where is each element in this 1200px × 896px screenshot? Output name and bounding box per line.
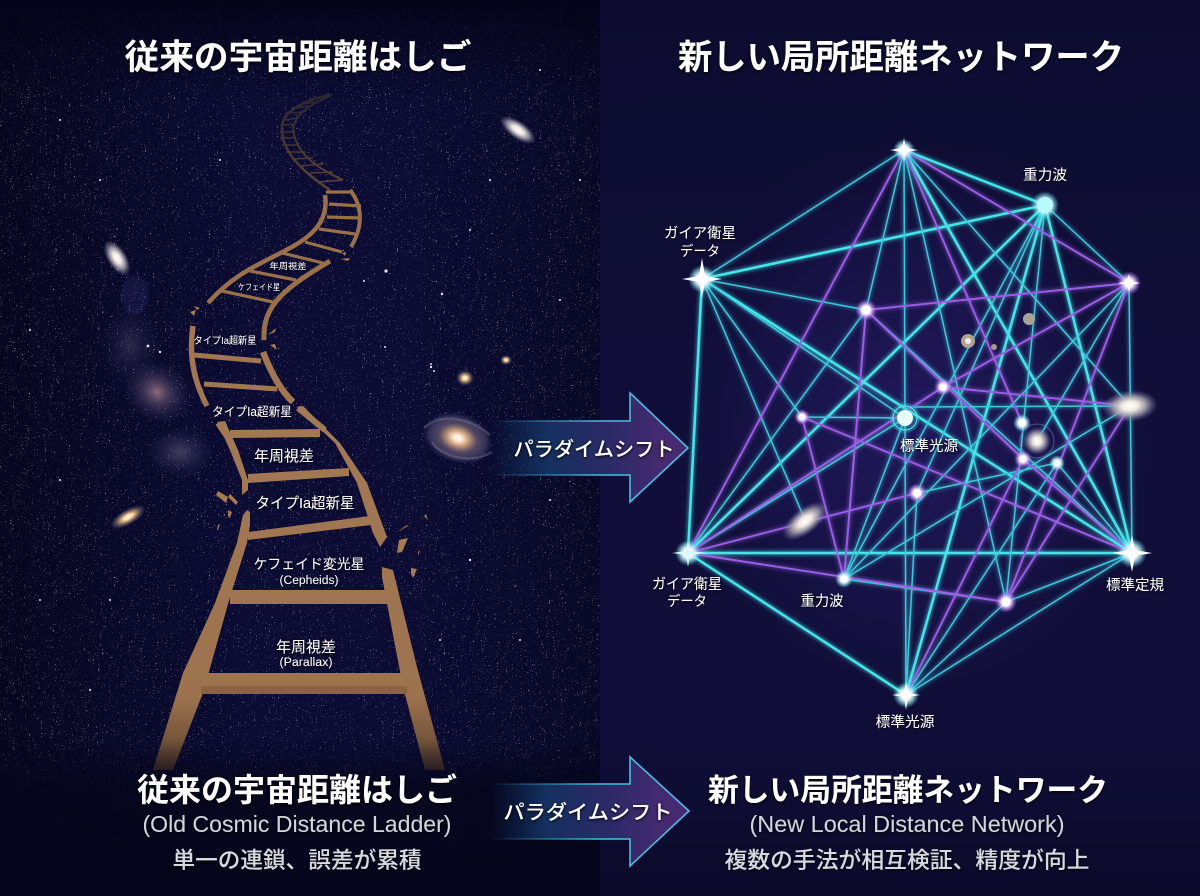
lower rails and rungs [153,510,445,770]
ladder [153,95,445,770]
caption: new network [708,773,1108,873]
top dark fade [0,0,600,100]
label: type Ia near: タイプIa超新星 [256,495,354,512]
node: gaia lower [672,540,706,567]
label: gaia lower data: データ [667,593,707,609]
ladder labels [194,261,364,669]
label: parallax english: (Parallax) [280,657,333,669]
arrow: paradigm shift upper: パラダイムシフト [514,438,674,461]
label: gaia upper data: データ [680,243,720,259]
label: cepheids english: (Cepheids) [280,575,339,587]
wood splinters [190,252,428,578]
label: type Ia mid: タイプIa超新星 [212,404,292,419]
network chart [652,138,1164,731]
galaxies in network [776,388,1159,548]
node: gaia upper [682,258,722,298]
node: purple right [1117,271,1141,295]
node: gravity wave top [1031,191,1059,219]
label: cepheids: ケフェイド変光星 [254,556,364,572]
galaxies left [98,111,540,534]
panel: new network background [600,0,1200,896]
bottom dark fade [600,740,1200,896]
node: central standard candle [890,403,920,433]
node: ruler [1112,535,1152,572]
label: gravity wave top: 重力波 [1023,167,1068,184]
starfield left [0,0,600,896]
thin cyan links [688,150,1132,695]
label: gaia upper: ガイア衛星 [664,225,736,242]
middle rails [217,406,387,547]
arrow: paradigm shift upper [490,393,688,502]
far dark section of ladder [280,95,343,190]
arrow: paradigm shift lower: パラダイムシフト [504,801,672,824]
label: parallax near: 年周視差 [276,639,336,656]
panel: old ladder background [0,0,600,896]
label: parallax mid: 年周視差 [254,448,314,465]
label: standard ruler: 標準定規 [1106,577,1164,594]
label: standard candle centre: 標準光源 [900,438,958,455]
caption description right: 複数の手法が相互検証、精度が向上 [724,848,1090,873]
label: gaia lower: ガイア衛星 [652,576,722,593]
caption english right: (New Local Distance Network) [750,811,1064,837]
bright stars [29,59,581,691]
network labels [652,167,1164,731]
caption english left: (Old Cosmic Distance Ladder) [142,811,452,837]
left bottom fade [0,740,600,896]
section with type Ia label [191,326,325,435]
caption heading right: 新しい局所距離ネットワーク [708,773,1108,808]
milky way band [100,275,214,478]
title: new network: 新しい局所距離ネットワーク [678,39,1124,77]
node: top star [890,138,918,162]
label: standard candle bottom: 標準光源 [876,714,935,731]
purple links [688,150,1132,695]
caption description left: 単一の連鎖、誤差が累積 [172,848,422,873]
arrow: paradigm shift lower [490,757,689,866]
node: bottom star [892,682,920,710]
label: parallax far: 年周視差 [270,261,307,271]
larger star layer [0,0,600,896]
thick cyan links [688,150,1132,695]
network lines [688,150,1132,695]
caption: old ladder [137,772,457,873]
hub stars and nodes [672,138,1159,710]
label: type Ia far: タイプIa超新星 [194,334,256,347]
caption heading left: 従来の宇宙距離はしご [137,772,457,808]
network centre glow [665,130,1165,710]
title: old ladder: 従来の宇宙距離はしご [124,39,472,77]
small nodes [794,299,1065,613]
label: cepheid far: ケフェイド星 [238,282,280,292]
label: gravity wave lower: 重力波 [800,593,844,610]
upper curved section [208,190,361,340]
